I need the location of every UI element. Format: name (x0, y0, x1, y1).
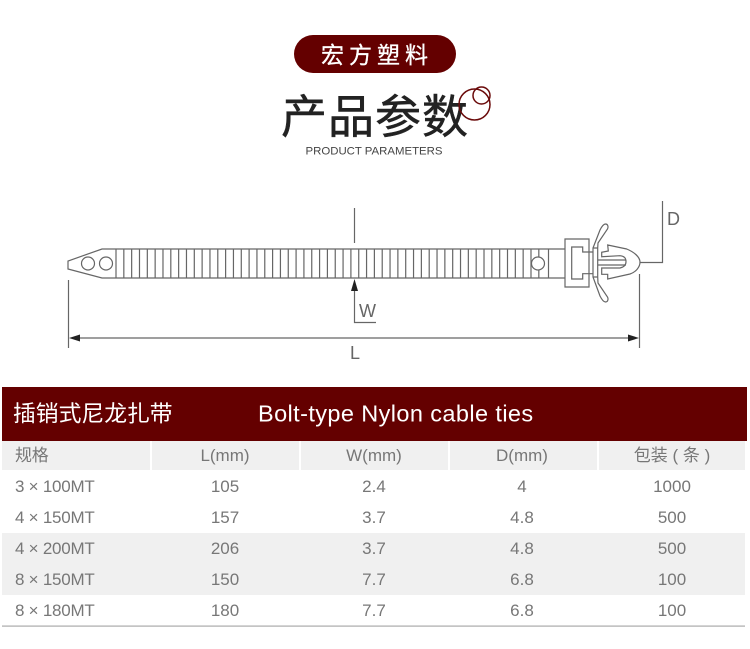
row: 8×150MT: 8 × 150MT (15, 570, 94, 589)
dimension D (640, 201, 680, 262)
row: 8×150MT: 150 (211, 570, 239, 589)
table header row: W(mm) (346, 446, 402, 465)
row: 4×200MT: 500 (658, 539, 686, 558)
row: 8×180MT: 6.8 (510, 601, 534, 620)
row: 4×200MT: 206 (211, 539, 239, 558)
row: 4×150MT: 4 × 150MT (15, 508, 94, 527)
row: 4×200MT (15, 539, 686, 558)
strap ribs (116, 249, 548, 278)
brand pill (294, 35, 456, 73)
row: 8×150MT: 6.8 (510, 570, 534, 589)
table header row: D(mm) (496, 446, 548, 465)
row: 8×150MT (15, 570, 686, 589)
table title band: Bolt-type Nylon cable ties (258, 400, 534, 426)
table header row: 规格 (15, 446, 49, 465)
row: 3×100MT (15, 477, 691, 496)
row: 8×150MT: 100 (658, 570, 686, 589)
row: 4×150MT: 157 (211, 508, 239, 527)
row: 3×100MT: 4 (517, 477, 527, 496)
table header row: 包装 ( 条 ) (634, 446, 710, 465)
row: 3×100MT: 105 (211, 477, 239, 496)
row: 8×180MT: 100 (658, 601, 686, 620)
locking head (565, 239, 593, 287)
subtitle: PRODUCT PARAMETERS (306, 146, 443, 158)
row: 8×180MT: 8 × 180MT (15, 601, 94, 620)
row: 3×100MT: 2.4 (362, 477, 386, 496)
row: 4×150MT (15, 508, 686, 527)
title: 产品参数 (281, 91, 469, 143)
dimension W: W (359, 301, 376, 321)
shaded rows background (2, 533, 745, 595)
row: 3×100MT: 1000 (653, 477, 691, 496)
cable tie diagram (68, 224, 640, 302)
table header row (2, 441, 745, 470)
dimension D: D (667, 209, 680, 229)
row: 4×200MT: 4 × 200MT (15, 539, 94, 558)
wings (593, 224, 608, 302)
row: 8×180MT: 180 (211, 601, 239, 620)
row: 8×150MT: 7.7 (362, 570, 386, 589)
row: 4×150MT: 4.8 (510, 508, 534, 527)
row: 3×100MT: 3 × 100MT (15, 477, 94, 496)
strap holes (82, 257, 94, 270)
strap outline (68, 249, 565, 278)
table title band: 插销式尼龙扎带 (13, 400, 173, 426)
table title band (2, 387, 747, 441)
row: 8×180MT (15, 601, 686, 620)
dimension L (68, 274, 640, 363)
row: 4×200MT: 3.7 (362, 539, 386, 558)
push-mount clip (598, 245, 640, 279)
dimension L: L (350, 343, 360, 363)
row: 8×180MT: 7.7 (362, 601, 386, 620)
row: 4×150MT: 3.7 (362, 508, 386, 527)
brand pill: 宏方塑料 (321, 42, 433, 68)
row: 4×150MT: 500 (658, 508, 686, 527)
table header row: L(mm) (200, 446, 250, 465)
dimension W (351, 208, 376, 322)
table (2, 387, 747, 627)
row: 4×200MT: 4.8 (510, 539, 534, 558)
